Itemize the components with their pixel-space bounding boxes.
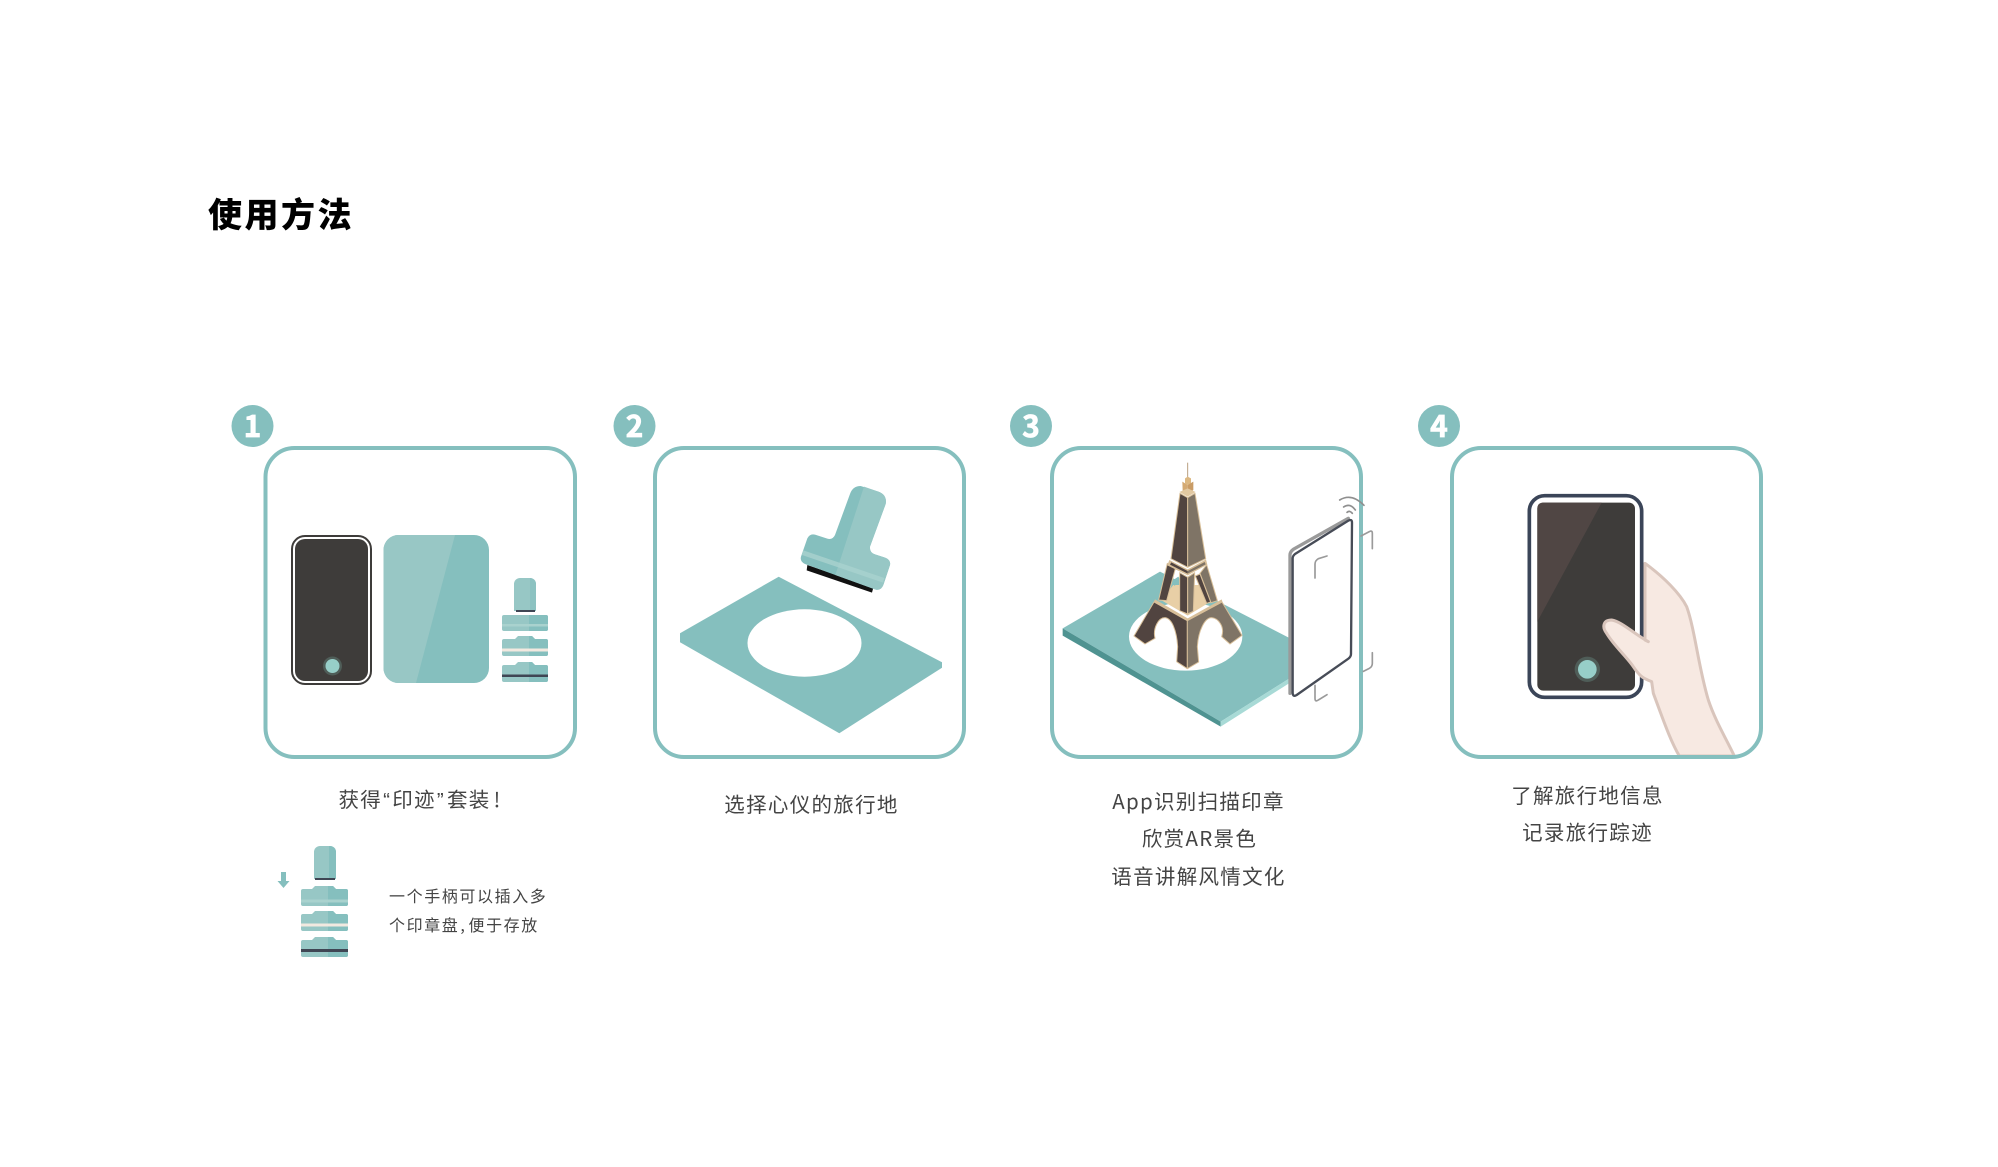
step 4 badge	[1418, 402, 1460, 447]
step 4 caption: 记录旅行踪迹	[1522, 816, 1653, 846]
step 3 caption: 欣赏AR景色	[1142, 822, 1257, 852]
icon: Eiffel tower	[1134, 463, 1242, 669]
icon: stamp set	[502, 578, 548, 682]
icon: stamp card	[384, 535, 489, 683]
step 4 frame	[1452, 448, 1761, 757]
wifi signal	[1340, 497, 1364, 513]
step 4 caption	[1511, 779, 1664, 846]
step 4 caption: 了解旅行地信息	[1511, 779, 1664, 809]
step 2 caption: 选择心仪的旅行地	[724, 788, 899, 818]
title: 使用方法	[208, 188, 354, 237]
icon: stacked stamp	[301, 846, 348, 957]
step 1 badge	[232, 402, 274, 447]
icon: tilted stamp	[801, 486, 890, 593]
step 2 badge	[614, 402, 656, 447]
tower middle legs	[1159, 563, 1217, 614]
step 3 frame	[1052, 448, 1361, 757]
icon: phone	[292, 536, 371, 684]
tower platforms	[1167, 559, 1207, 575]
scan mat	[1063, 572, 1293, 727]
icon: down arrow	[278, 872, 290, 888]
step 3 badge	[1010, 402, 1052, 447]
scan brackets	[1315, 531, 1372, 701]
step 1 badge: 1	[244, 402, 261, 446]
step 4 badge: 4	[1430, 402, 1448, 446]
panel: step 1	[232, 402, 575, 957]
step 2 frame	[655, 448, 964, 757]
step 3 caption: 语音讲解风情文化	[1111, 860, 1286, 890]
tower upper faces	[1171, 493, 1206, 567]
step 2 badge: 2	[626, 402, 643, 446]
note text	[389, 883, 547, 936]
step 1 frame	[266, 448, 575, 757]
stamp mat with blank circle	[680, 577, 942, 733]
note text: 一个手柄可以插入多	[389, 883, 547, 907]
note text: 个印章盘,便于存放	[389, 912, 539, 936]
step 1 caption: 获得“印迹”套装!	[338, 783, 502, 813]
icon: phone in hand	[1529, 496, 1734, 756]
step 3 badge: 3	[1022, 402, 1040, 446]
step 3 caption: App识别扫描印章	[1112, 785, 1285, 815]
tower lower legs	[1134, 602, 1242, 669]
panel: step 3	[1010, 402, 1372, 890]
step 3 caption	[1111, 785, 1286, 890]
panel: step 4	[1418, 402, 1761, 846]
panel: step 2	[614, 402, 964, 818]
icon: tablet scanning	[1290, 497, 1372, 701]
